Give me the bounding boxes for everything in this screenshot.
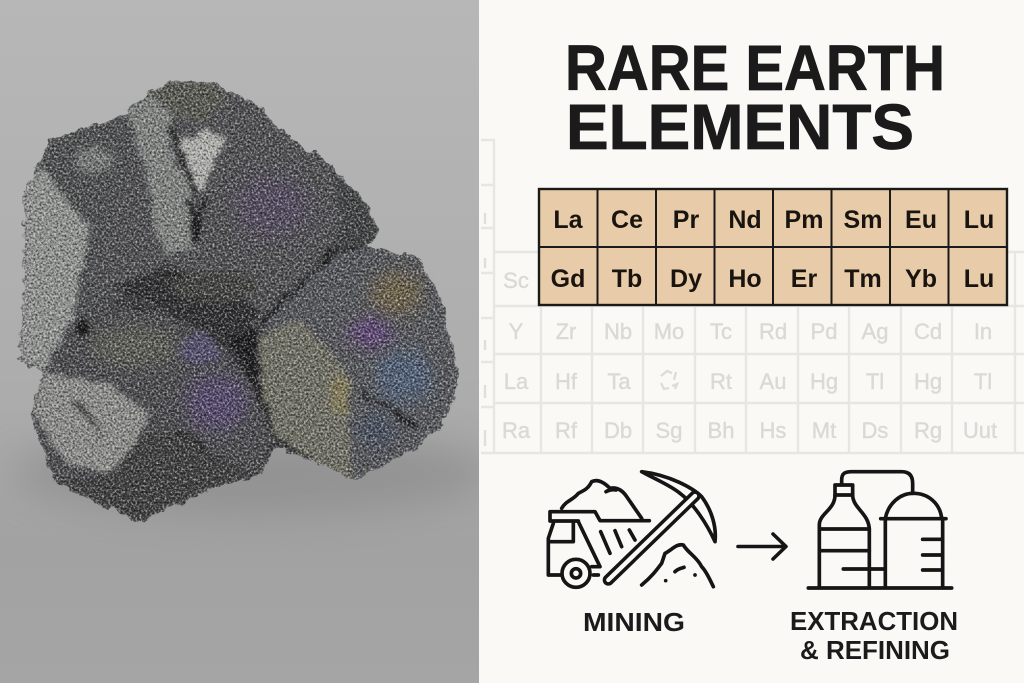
faded periodic table: Tl	[974, 369, 992, 394]
photo: rare earth ore rocks	[13, 80, 493, 520]
gap between rocks	[227, 327, 277, 447]
faded periodic table: Rf	[555, 418, 578, 443]
row 2 element symbols: Lu	[964, 265, 994, 293]
faded periodic table: Db	[604, 418, 632, 443]
faded periodic table: In	[974, 319, 992, 344]
row 1 element symbols: Nd	[728, 206, 762, 234]
bottom left rock	[30, 303, 273, 520]
label: extraction and refining	[790, 606, 958, 665]
faded periodic table: Mo	[654, 319, 684, 344]
faded periodic table: Zr	[556, 319, 576, 344]
faded periodic table: Ta	[607, 369, 631, 394]
faded periodic table: Hf	[555, 369, 578, 394]
faded periodic table: Mt	[812, 418, 836, 443]
faded periodic table: Cd	[914, 319, 942, 344]
row 1 element symbols	[553, 206, 994, 234]
faded periodic table: Hs	[760, 418, 786, 443]
faded periodic table: Hg	[810, 369, 838, 394]
faded periodic table: Bh	[708, 418, 734, 443]
faded periodic table: Tc	[710, 319, 732, 344]
faded periodic table: Ra	[502, 418, 531, 443]
row 1 element symbols: La	[553, 206, 584, 234]
faded periodic table: Sg	[656, 418, 682, 443]
right rock	[257, 247, 460, 480]
label: extraction and refining: EXTRACTION	[790, 606, 958, 636]
arrow	[738, 534, 786, 559]
faded periodic table: Sc	[503, 268, 529, 293]
table cells	[539, 189, 1007, 305]
faded periodic table: Y	[509, 319, 524, 344]
silhouette base	[20, 80, 460, 520]
faded periodic table: Hg	[914, 369, 942, 394]
title: ELEMENTS	[566, 91, 914, 163]
faded periodic table: Pd	[811, 319, 837, 344]
rock cluster	[20, 80, 460, 520]
row 1 element symbols: Ce	[611, 206, 643, 234]
row 2 element symbols	[551, 265, 994, 293]
row 1 element symbols: Pm	[785, 206, 823, 234]
faded periodic table: Ds	[862, 418, 888, 443]
back left rock	[20, 115, 167, 370]
label: extraction and refining: & REFINING	[800, 635, 950, 665]
faded periodic table: La	[504, 369, 529, 394]
rock shadow	[13, 430, 493, 517]
faded periodic table: Nb	[604, 319, 632, 344]
icon: mining truck and pickaxe	[548, 472, 715, 587]
row 1 element symbols: Eu	[905, 206, 937, 234]
title	[565, 32, 945, 163]
faded periodic table: Rt	[710, 369, 732, 394]
title: RARE EARTH	[565, 32, 945, 104]
row 2 element symbols: Yb	[905, 265, 937, 293]
highlighted lanthanide table	[539, 189, 1007, 305]
row 1 element symbols: Sm	[844, 206, 882, 234]
faded periodic table: Au	[760, 369, 786, 394]
row 1 element symbols: Lu	[964, 206, 994, 234]
faded periodic table: Ag	[862, 319, 888, 344]
back right rock	[277, 127, 378, 247]
row 2 element symbols: Tm	[844, 265, 882, 293]
label: mining: MINING	[583, 607, 685, 637]
row 2 element symbols: Dy	[670, 265, 702, 293]
row 2 element symbols: Ho	[728, 265, 762, 293]
upper rock	[83, 80, 343, 340]
faded periodic table	[481, 140, 1024, 453]
faded periodic table: Uut	[963, 418, 997, 443]
faded periodic table: Rg	[914, 418, 942, 443]
faded periodic table: Rd	[759, 319, 787, 344]
faded periodic table: Tl	[866, 369, 884, 394]
panel: right background	[479, 0, 1024, 683]
panel: photo background	[0, 0, 479, 683]
icon: extraction and refining tanks	[808, 472, 952, 588]
row 2 element symbols: Er	[791, 265, 817, 293]
row 2 element symbols: Gd	[551, 265, 585, 293]
row 1 element symbols: Pr	[673, 206, 699, 234]
icon: faded recycling glyph	[661, 371, 677, 389]
row 2 element symbols: Tb	[612, 265, 642, 293]
